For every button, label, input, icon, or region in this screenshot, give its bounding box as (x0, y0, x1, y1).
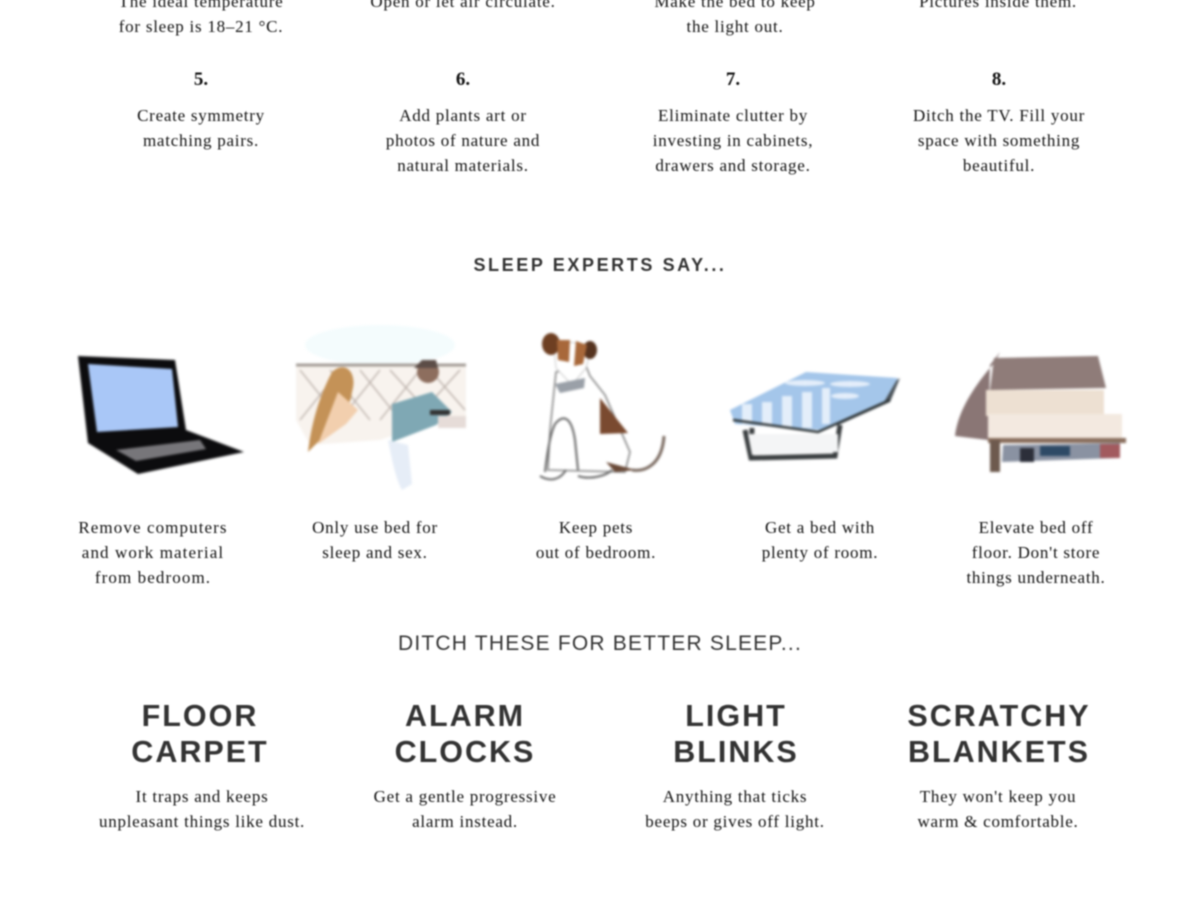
experts caption 1: Remove computers (78, 518, 228, 537)
experts caption 5: things underneath. (966, 568, 1106, 587)
tip 3 text: the light out. (687, 17, 783, 36)
tip 8 text: Ditch the TV. Fill your (913, 106, 1085, 125)
tip 8 text (912, 106, 1086, 175)
tip 7 text: Eliminate clutter by (658, 106, 808, 125)
experts caption 5: floor. Don't store (972, 543, 1100, 562)
experts caption 1: from bedroom. (95, 568, 211, 587)
experts caption 4: Get a bed with (765, 518, 875, 537)
tip 5 number: 5. (194, 69, 208, 90)
tip 7 text: drawers and storage. (655, 156, 811, 175)
tip 6 number: 6. (456, 69, 470, 90)
ditch item: scratchy blankets title: SCRATCHY (907, 699, 1091, 733)
tip 7 number: 7. (726, 69, 740, 90)
ditch item: light blinks title (673, 699, 799, 769)
tip 3 text (654, 0, 816, 36)
experts caption 1 (78, 518, 228, 587)
experts caption 5: Elevate bed off (979, 518, 1093, 537)
experts caption 2: Only use bed for (312, 518, 438, 537)
experts caption 2 (312, 518, 438, 562)
experts caption 2: sleep and sex. (322, 543, 428, 562)
tip 8 text: space with something (918, 131, 1080, 150)
ditch item: floor carpet text (98, 787, 305, 832)
tip 7 text: investing in cabinets, (653, 131, 813, 150)
tip 7 text (652, 106, 813, 176)
ditch item: scratchy blankets title: BLANKETS (908, 735, 1090, 769)
ditch item: floor carpet title: CARPET (131, 735, 269, 769)
ditch item: light blinks title: LIGHT (685, 699, 787, 733)
experts caption 3: out of bedroom. (536, 543, 656, 562)
tip 6 text: photos of nature and (386, 131, 540, 150)
ditch item: floor carpet text: unpleasant things like dust. (99, 812, 305, 831)
tip 6 text (386, 106, 540, 175)
icon: raised bed with storage (955, 352, 1126, 472)
ditch item: alarm clocks text (373, 787, 556, 831)
tip 8 text: beautiful. (963, 156, 1035, 175)
ditch item: alarm clocks title (394, 699, 535, 769)
tip 5 text: Create symmetry (137, 106, 265, 125)
tip 5 text (136, 106, 265, 150)
heading: ditch these for better sleep: DITCH THESE FOR BETTER SLEEP... (398, 632, 802, 655)
ditch item: light blinks text (644, 787, 825, 832)
icon: couple in bed (296, 325, 466, 490)
tip 1 text (118, 0, 284, 36)
icon: laptop (78, 356, 244, 474)
ditch item: floor carpet title (131, 699, 269, 769)
experts caption 3: Keep pets (559, 518, 633, 537)
ditch item: light blinks text: Anything that ticks (663, 787, 807, 806)
ditch item: scratchy blankets text (917, 787, 1079, 831)
ditch item: alarm clocks text: Get a gentle progressive (374, 787, 556, 806)
ditch item: alarm clocks text: alarm instead. (412, 812, 518, 831)
ditch item: floor carpet text: It traps and keeps (136, 787, 268, 806)
ditch item: scratchy blankets text: warm & comfortable. (917, 812, 1079, 831)
ditch item: light blinks text: beeps or gives off light. (645, 812, 825, 831)
tip 6 text: Add plants art or (399, 106, 527, 125)
icon: folding bed (730, 372, 900, 458)
ditch item: alarm clocks title: CLOCKS (395, 735, 535, 769)
icon: dog (540, 333, 664, 479)
experts caption 3 (536, 518, 656, 562)
tip 6 text: natural materials. (397, 156, 529, 175)
experts caption 5 (966, 518, 1106, 588)
experts caption 1: and work material (82, 543, 224, 562)
ditch item: light blinks title: BLINKS (673, 735, 799, 769)
ditch item: floor carpet title: FLOOR (142, 699, 258, 733)
ditch item: scratchy blankets text: They won't keep you (920, 787, 1076, 806)
experts caption 4 (762, 518, 878, 562)
ditch item: scratchy blankets title (907, 699, 1091, 769)
heading: sleep experts say: SLEEP EXPERTS SAY... (473, 255, 727, 275)
tip 5 text: matching pairs. (143, 131, 259, 150)
ditch item: alarm clocks title: ALARM (405, 699, 525, 733)
experts caption 4: plenty of room. (762, 543, 878, 562)
tip 8 number: 8. (992, 69, 1006, 90)
tip 1 text: for sleep is 18–21 °C. (119, 17, 283, 36)
